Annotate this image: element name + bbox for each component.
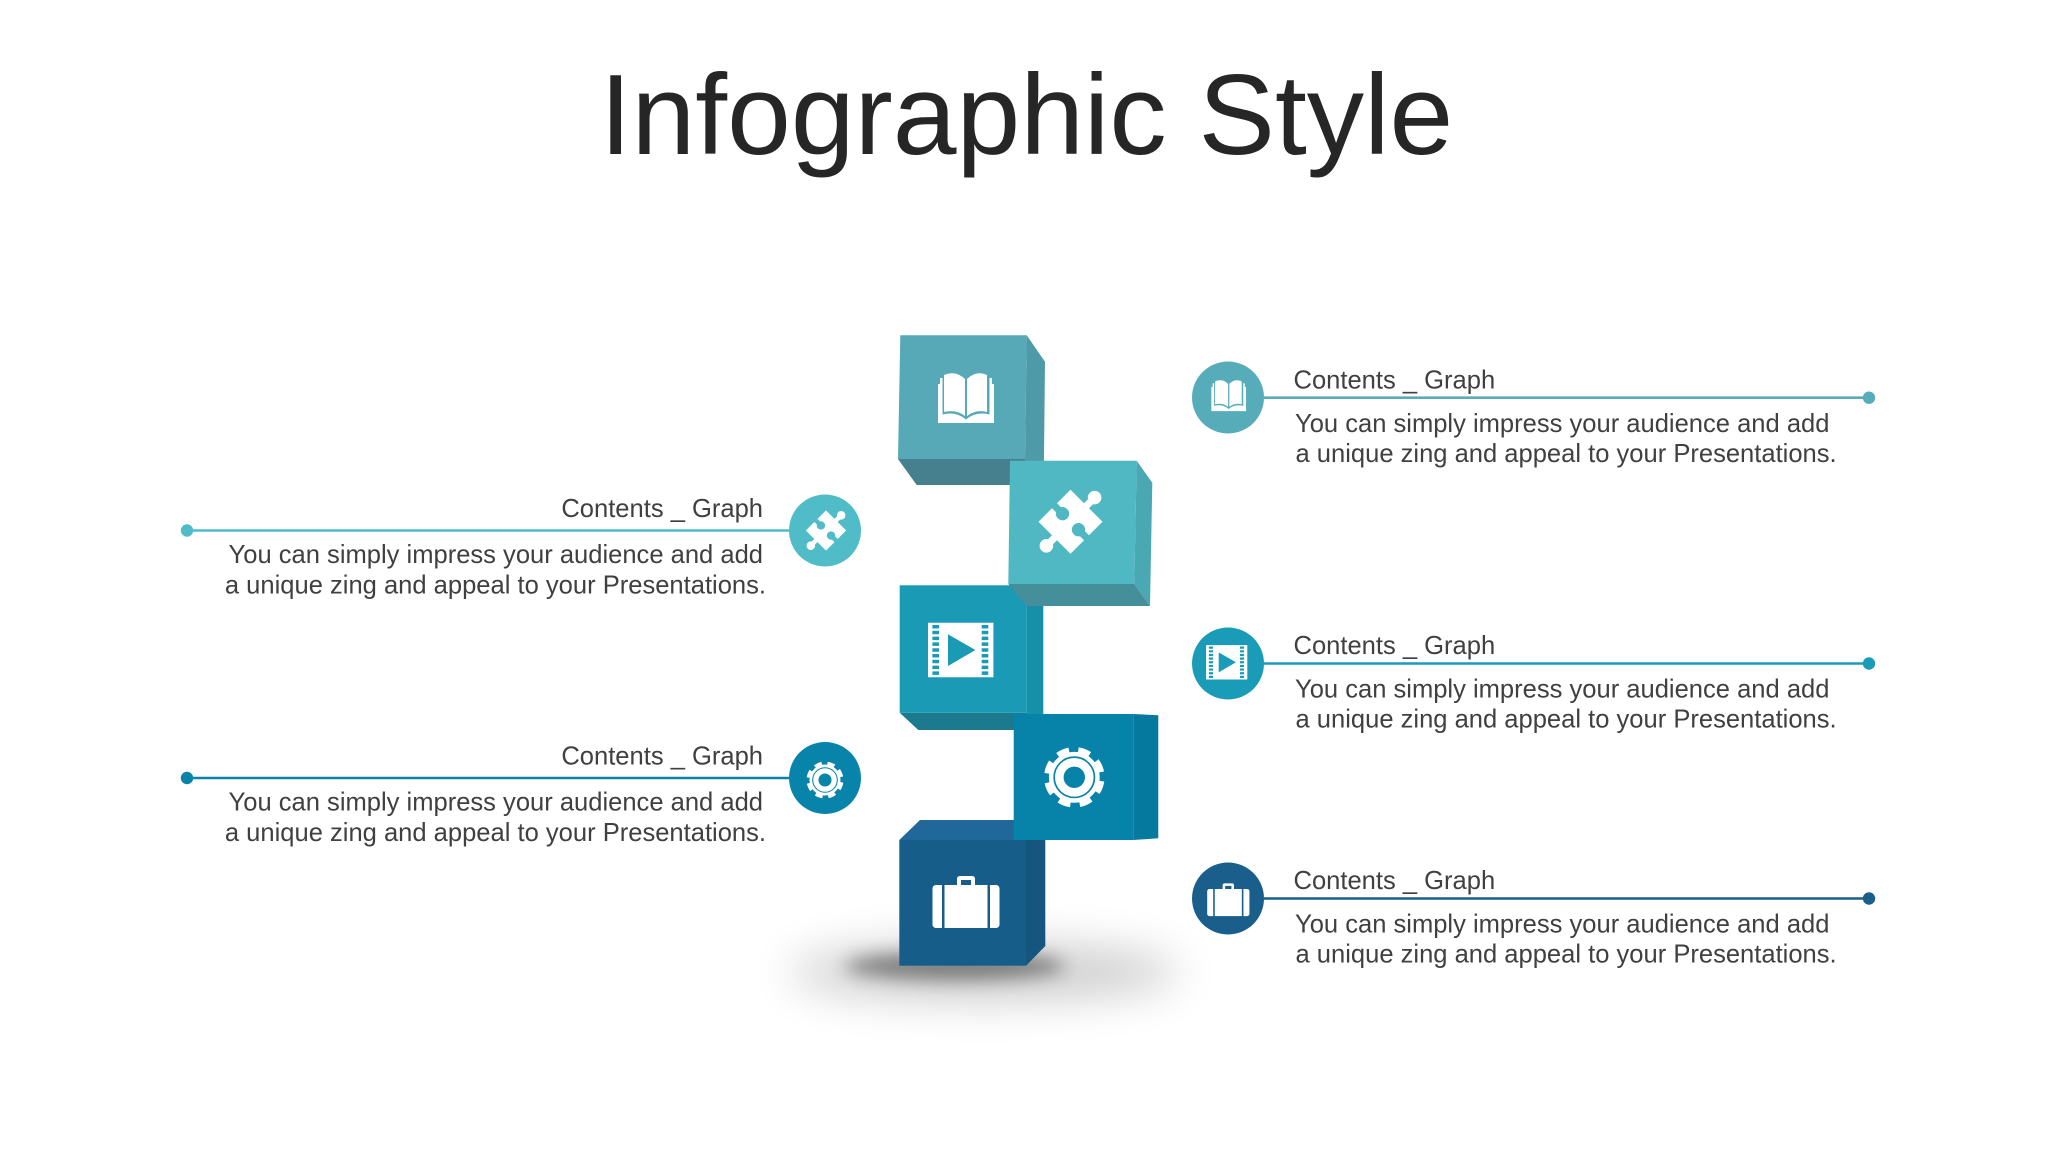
callout: gear, left: a unique zing and appeal to your Presentations.	[225, 819, 766, 847]
callout: briefcase, right: Contents _ Graph	[1294, 867, 1495, 895]
callout: film, right: Contents _ Graph	[1294, 632, 1495, 660]
icon: puzzle piece	[1038, 490, 1102, 554]
callout: film, right: a unique zing and appeal to your Presentations.	[1296, 706, 1837, 734]
cube: puzzle	[1008, 461, 1152, 606]
callout: gear, left: You can simply impress your audience and add	[229, 788, 763, 816]
cube: film	[900, 585, 1043, 730]
callout: book, right	[1192, 362, 1875, 468]
callout: puzzle, left: You can simply impress your audience and add	[229, 541, 763, 569]
icon: film play	[928, 623, 993, 677]
title: Infographic Style	[600, 51, 1453, 179]
callout: film, right: You can simply impress your audience and add	[1295, 676, 1829, 704]
cube: gear	[1014, 714, 1158, 840]
shadow under cube stack	[790, 944, 1180, 1000]
cube: book	[898, 335, 1045, 485]
callout: puzzle, left	[181, 494, 861, 600]
callout: puzzle, left: a unique zing and appeal to your Presentations.	[225, 572, 766, 600]
cube: briefcase	[899, 820, 1045, 966]
callout: book, right: Contents _ Graph	[1294, 366, 1495, 394]
callout: gear, left: Contents _ Graph	[561, 742, 763, 770]
callout: film, right	[1192, 628, 1875, 734]
callout: gear, left	[181, 742, 861, 847]
icon: book	[938, 373, 994, 423]
callout: book, right: You can simply impress your audience and add	[1295, 410, 1829, 438]
callout: briefcase, right: a unique zing and appeal to your Presentations.	[1296, 940, 1837, 968]
callout: puzzle, left: Contents _ Graph	[561, 495, 763, 523]
icon: briefcase	[932, 876, 1000, 928]
callout: briefcase, right: You can simply impress your audience and add	[1295, 910, 1829, 938]
callout: briefcase, right	[1192, 862, 1875, 968]
icon: gear	[1044, 747, 1105, 808]
callout: book, right: a unique zing and appeal to your Presentations.	[1296, 440, 1837, 468]
